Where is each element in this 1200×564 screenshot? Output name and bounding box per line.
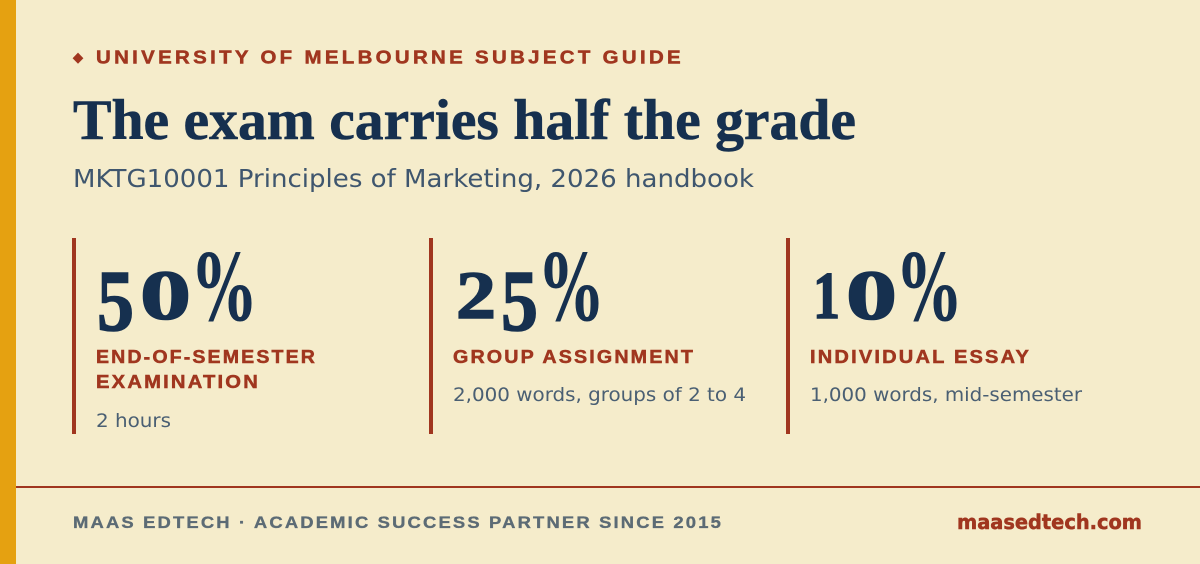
footer rule [16, 486, 1200, 488]
stat: 10%: 1 [813, 259, 840, 333]
stat: 25%: 5 [501, 252, 538, 349]
panel: essay [786, 234, 1082, 434]
stat: 50%: % [196, 234, 253, 342]
detail: exam: 2 hours [96, 410, 171, 432]
bar: group [429, 238, 433, 434]
panel: group assignment [429, 234, 746, 434]
title: The exam carries half the grade [73, 89, 856, 152]
stat: 50%: 0 [140, 258, 191, 335]
panel: exam: EXAMINATION [96, 371, 260, 392]
footer url: maasedtech.com [957, 510, 1142, 534]
eyebrow: UNIVERSITY OF MELBOURNE SUBJECT GUIDE [96, 46, 684, 68]
stat: 25%: 2 [456, 257, 496, 333]
stat: 10%: 0 [846, 258, 897, 335]
subtitle: MKTG10001 Principles of Marketing, 2026 handbook [73, 164, 755, 193]
label: group: GROUP ASSIGNMENT [453, 346, 695, 367]
footer text: MAAS EDTECH · ACADEMIC SUCCESS PARTNER SINCE 2015 [73, 513, 723, 532]
stat: 50%: 5 [97, 252, 134, 349]
label: essay: INDIVIDUAL ESSAY [810, 346, 1031, 367]
bar: exam [72, 238, 76, 434]
stat: 25% [456, 234, 600, 349]
accent strip [0, 0, 16, 564]
stat: 10%: % [901, 234, 958, 342]
stat: 25%: % [543, 234, 600, 342]
stat: 50% [97, 234, 253, 349]
detail: essay: 1,000 words, mid-semester [810, 384, 1082, 406]
panel: exam [72, 234, 317, 434]
icon: diamond [73, 53, 83, 64]
bar: essay [786, 238, 790, 434]
detail: group: 2,000 words, groups of 2 to 4 [453, 384, 746, 406]
label: exam: END-OF-SEMESTER [96, 346, 317, 367]
stat: 10% [813, 234, 958, 342]
